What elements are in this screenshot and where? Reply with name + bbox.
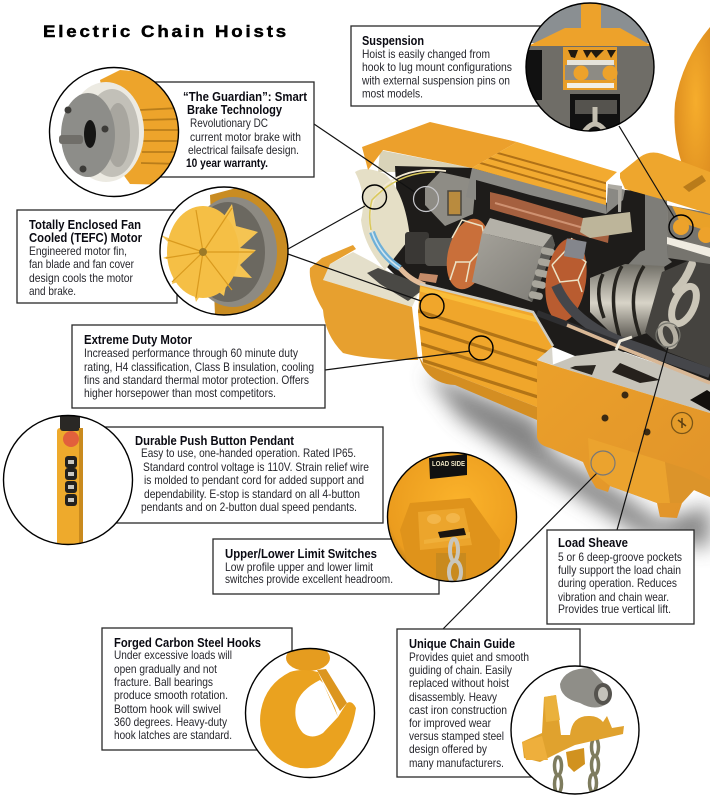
body text: [141, 446, 369, 514]
body text: for improved wear: [409, 716, 491, 730]
cream fan shroud: [355, 169, 410, 270]
copper winding right: [540, 236, 592, 324]
marker: chain: [656, 323, 680, 347]
body text: 360 degrees. Heavy-duty: [114, 715, 227, 729]
heading: [29, 218, 142, 245]
body text: higher horsepower than most competitors.: [84, 386, 276, 400]
body text: hook to lug mount configurations: [362, 60, 512, 74]
marker: fan shroud: [362, 185, 386, 209]
body text: fins and standard thermal motor protection. Offers: [84, 373, 309, 387]
heading: Unique Chain Guide: [409, 637, 515, 651]
body text: dependability. E-stop is standard on all 4-button: [144, 487, 360, 501]
body text: fracture. Ball bearings: [114, 675, 213, 689]
heading: Totally Enclosed Fan: [29, 218, 141, 232]
heading: Brake Technology: [187, 103, 282, 117]
hoist cutaway illustration: [310, 27, 710, 548]
body text: current motor brake with: [190, 130, 301, 144]
wire tie: [616, 337, 632, 350]
dark internal cavity: [380, 166, 710, 382]
body text: Low profile upper and lower limit: [225, 560, 374, 574]
body text: Bottom hook will swivel: [114, 702, 221, 716]
marker: motor fins: [469, 336, 493, 360]
heading: Load Sheave: [558, 536, 628, 550]
icon: chain guide part: [511, 666, 639, 794]
leader line: fan lower: [288, 254, 421, 301]
panel: suspension: [351, 3, 654, 134]
icon: pendant: [3, 413, 133, 548]
top cover left: [362, 122, 517, 170]
motor frame: [425, 172, 476, 226]
text box: [17, 210, 177, 303]
heading: Upper/Lower Limit Switches: [225, 547, 377, 561]
title: Electric Chain Hoists: [43, 23, 289, 41]
panel: extreme duty motor: [72, 325, 325, 408]
marker: fan housing: [420, 294, 444, 318]
body text: vibration and chain wear.: [558, 590, 669, 604]
stator: [472, 218, 555, 302]
body text: versus stamped steel: [409, 729, 504, 743]
body text: [409, 650, 529, 770]
heading: Durable Push Button Pendant: [135, 434, 295, 448]
text box: [213, 539, 439, 594]
body text: [29, 244, 134, 298]
chain housing: [645, 260, 710, 368]
panel: push button pendant: [3, 413, 383, 548]
cream tray: [323, 252, 420, 307]
body text: fully support the load chain: [558, 563, 681, 577]
panel: forged hooks: [102, 628, 375, 778]
load chain links: [657, 264, 702, 349]
body text: hook latches are standard.: [114, 728, 232, 742]
heading: [183, 90, 308, 117]
copper winding left: [440, 214, 496, 294]
motor belly: [418, 355, 537, 420]
marker: suspension pin: [669, 215, 693, 239]
body text: with external suspension pins on: [361, 74, 510, 88]
panel: TEFC motor: [17, 187, 290, 315]
text box: [102, 628, 292, 750]
grey frame upright: [606, 184, 625, 214]
gear and shaft: [405, 232, 459, 266]
body text: rating, H4 classification, Class B insulation, cooling: [84, 360, 314, 374]
body text: [114, 648, 232, 742]
body text: Standard control voltage is 110V. Strain relief wire: [143, 460, 369, 474]
commutator: [580, 212, 632, 238]
chains: [554, 738, 598, 793]
heading: Extreme Duty Motor: [84, 333, 192, 347]
sheave: [560, 668, 610, 708]
brake mechanism plate: [367, 268, 420, 301]
text box: [72, 325, 325, 408]
suspension pocket: [667, 205, 710, 264]
heading: Suspension: [362, 34, 424, 48]
sheave bearing rings: [590, 264, 668, 342]
marker: brake: [414, 186, 438, 212]
text box: [105, 427, 383, 523]
body text: during operation. Reduces: [558, 576, 677, 590]
body text: produce smooth rotation.: [114, 688, 228, 702]
heading: Forged Carbon Steel Hooks: [114, 636, 261, 650]
body text: [84, 346, 314, 400]
body text: pendants and on 2-button dual speed pendants.: [141, 500, 357, 514]
icon: brake motor: [49, 67, 180, 197]
body text: most models.: [362, 86, 423, 100]
heading: Cooled (TEFC) Motor: [29, 231, 142, 245]
body text: is molded to pendant cord for added support and: [144, 473, 364, 487]
body text: disassembly. Heavy: [409, 690, 497, 704]
top right housing: [620, 153, 710, 214]
block holes and screw: [602, 392, 692, 436]
rotor teeth: [528, 247, 555, 300]
body text: Revolutionary DC: [190, 116, 268, 130]
icon: fan: [160, 187, 290, 315]
grey wire bundle: [556, 285, 710, 373]
icon: limit switch close-up: [387, 452, 517, 585]
grey edge along motor: [420, 284, 553, 346]
text box: [547, 530, 694, 624]
body text: guiding of chain. Easily: [409, 663, 512, 677]
text box: [397, 629, 580, 777]
wire loop: [370, 170, 446, 285]
lower left cover: [310, 245, 418, 360]
icon: hook: [245, 645, 375, 778]
body text: switches provide excellent headroom.: [225, 572, 393, 586]
panel: chain guide: [397, 629, 639, 794]
ribbed motor housing: [418, 285, 553, 407]
body text: Engineered motor fin,: [29, 244, 127, 258]
body text: 5 or 6 deep-groove pockets: [558, 550, 682, 564]
panel: limit switches: [213, 452, 517, 594]
body text: 10 year warranty.: [186, 156, 268, 170]
body text: [186, 116, 301, 170]
yellow bracket: [522, 695, 624, 762]
leader line: load sheave: [617, 347, 668, 530]
body text: design offered by: [409, 742, 487, 756]
icon: suspension close-up: [526, 3, 654, 134]
body text: many manufacturers.: [409, 756, 504, 770]
body text: design cools the motor: [29, 271, 133, 285]
block lug: [588, 438, 670, 503]
top cover ribs: [472, 142, 617, 205]
block top platform: [552, 350, 710, 413]
body text: Increased performance through 60 minute duty: [84, 346, 298, 360]
body text: [558, 550, 682, 616]
body text: electrical failsafe design.: [188, 143, 299, 157]
body text: Hoist is easily changed from: [362, 47, 490, 61]
grey pillar: [625, 193, 672, 282]
body text: Under excessive loads will: [114, 648, 232, 662]
body text: cast iron construction: [409, 703, 507, 717]
body text: Easy to use, one-handed operation. Rated IP65.: [141, 446, 356, 460]
load side label: LOAD SIDE: [432, 459, 465, 468]
body text: [361, 47, 512, 100]
leader line: fan upper: [288, 206, 365, 249]
grey beam under top ribs: [466, 168, 606, 214]
text box: [150, 82, 314, 177]
body text: open gradually and not: [114, 662, 218, 676]
leader line: chain guide: [443, 473, 597, 629]
beige support under cover: [378, 150, 472, 174]
text box: [351, 26, 551, 106]
load block: [537, 360, 710, 518]
leader line: suspension: [619, 126, 674, 217]
body text: replaced without hoist: [409, 676, 510, 690]
leader line: guardian brake: [314, 124, 416, 193]
body text: and brake.: [29, 284, 76, 298]
body text: Provides quiet and smooth: [409, 650, 529, 664]
panel: guardian brake: [49, 67, 314, 197]
drop shadow: [425, 372, 710, 548]
copper brush band: [490, 192, 610, 243]
body text: fan blade and fan cover: [29, 257, 134, 271]
body text: [225, 560, 393, 586]
lifting hook body at top right: [674, 27, 710, 192]
heading: “The Guardian”: Smart: [183, 90, 308, 104]
panel: load sheave: [547, 530, 694, 624]
marker: chain guide: [591, 451, 615, 475]
leader line: motor: [325, 351, 470, 370]
body text: Provides true vertical lift.: [558, 602, 671, 616]
